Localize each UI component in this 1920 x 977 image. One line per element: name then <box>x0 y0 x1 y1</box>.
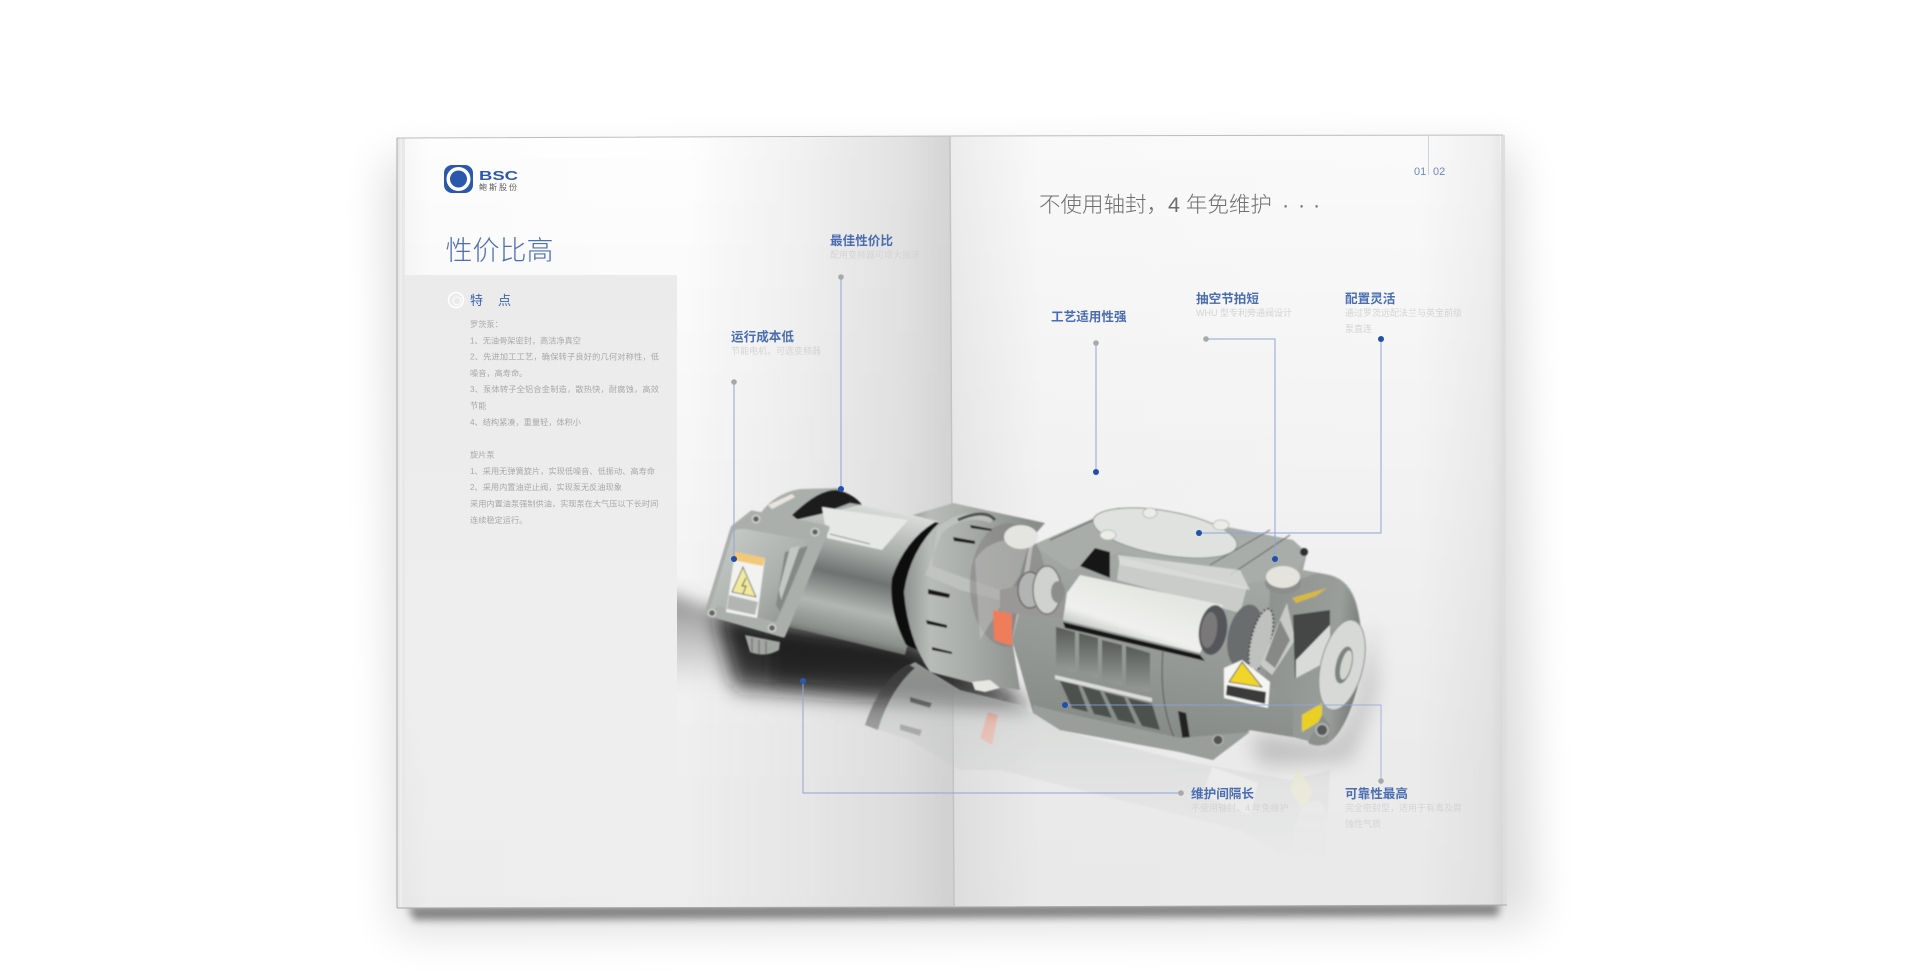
page stack edges <box>397 138 405 908</box>
callout: 工艺适用性强 <box>1051 309 1127 475</box>
product image: pump <box>677 487 1384 808</box>
callout: 维护间隔长: 不使用轴封，4 年免维护 <box>1191 802 1289 813</box>
callout: 可靠性最高: 蚀性气质 <box>1345 818 1381 829</box>
casing divider <box>1161 649 1174 737</box>
timing gear <box>1226 604 1262 664</box>
silhouette <box>1019 545 1362 712</box>
pump body <box>970 499 1374 760</box>
black coupling ring <box>891 522 946 650</box>
ground shadow <box>660 590 1376 765</box>
features text: 罗茨泵： <box>470 319 503 329</box>
junction box <box>707 513 827 655</box>
features text: 噪音，高寿命。 <box>470 368 527 378</box>
logo mark <box>444 165 473 193</box>
right page <box>950 135 1506 907</box>
features heading: 点 <box>498 293 511 308</box>
fan housing <box>904 503 1045 690</box>
lug bolt <box>1308 715 1330 746</box>
book pages <box>397 135 1507 908</box>
callout: 可靠性最高: 可靠性最高 <box>1345 786 1408 801</box>
features text: 3、泵体转子全铝合金制造，散热快，耐腐蚀，高效 <box>470 384 659 394</box>
callout: 运行成本低 <box>731 329 821 562</box>
transparent cutaway disc <box>970 523 1046 647</box>
callout: 运行成本低: 节能电机，可选变频器 <box>731 345 821 356</box>
book shadow <box>385 150 1535 932</box>
callout: 维护间隔长 <box>800 678 1289 813</box>
casing left flange <box>1012 614 1292 736</box>
features text: 1、采用无弹簧旋片，实现低噪音、低振动、高寿命 <box>470 466 655 476</box>
page numbers: 02 <box>1433 166 1445 178</box>
headline: · <box>1313 193 1320 217</box>
callout: 抽空节拍短 <box>1196 291 1292 562</box>
oil knob <box>1265 572 1301 594</box>
features text: 连续稳定运行。 <box>470 515 527 525</box>
icon: ring <box>448 292 464 308</box>
warning label <box>726 552 765 618</box>
features heading: 特 <box>470 293 483 308</box>
rotor end <box>1198 604 1228 656</box>
end housing <box>1269 574 1360 742</box>
logo wordmark: BSC <box>479 168 519 183</box>
black ring <box>792 490 862 522</box>
callout: 运行成本低: 运行成本低 <box>731 329 794 344</box>
cable gland <box>745 635 780 655</box>
features panel background <box>405 275 677 907</box>
callout: 维护间隔长: 维护间隔长 <box>1191 786 1254 801</box>
top cover <box>1033 508 1307 585</box>
motor end cap <box>761 487 862 520</box>
base foot <box>1033 705 1250 760</box>
shaft and bearings <box>1000 586 1040 614</box>
fins lower <box>1060 681 1160 730</box>
features text: 采用内置油泵强制供油，实现泵在大气压以下长时间 <box>470 498 658 508</box>
white knob <box>1004 525 1038 549</box>
callout: 配置灵活: 通过罗茨远配法兰与英宝前级 <box>1345 307 1462 318</box>
features text: 1、无油骨架密封，高洁净真空 <box>470 336 581 346</box>
title: 性价比高 <box>446 236 554 266</box>
data plate <box>1293 610 1330 678</box>
callout: 工艺适用性强: 工艺适用性强 <box>1051 309 1127 324</box>
cover plate <box>1092 506 1237 558</box>
callout: 抽空节拍短: WHU 型专利旁通阀设计 <box>1196 307 1292 318</box>
page numbers: 01 <box>1414 166 1426 178</box>
hot warning sticker <box>1224 660 1270 708</box>
features text: 2、采用内置油逆止阀，实现泵无反油现象 <box>470 482 622 492</box>
motor cylinder <box>775 505 938 655</box>
features text <box>470 319 659 525</box>
black clamp <box>1080 548 1110 578</box>
callout: 最佳性价比: 最佳性价比 <box>830 233 893 248</box>
upper rotor <box>1117 557 1247 613</box>
bracket <box>1260 603 1295 675</box>
page numbers <box>1414 136 1445 178</box>
callout: 最佳性价比: 配用变频器可增大抽速 <box>830 249 920 260</box>
callout: 抽空节拍短: 抽空节拍短 <box>1196 291 1259 306</box>
features text: 节能 <box>470 400 486 410</box>
lower rotor <box>1063 575 1223 653</box>
bottom yellow sticker <box>1302 703 1322 732</box>
fan slots <box>926 525 992 654</box>
features heading <box>470 293 511 308</box>
features text: 4、结构紧凑，重量轻，体积小 <box>470 417 581 427</box>
fins crossbar <box>1055 675 1152 702</box>
motor body <box>752 488 1045 692</box>
callout: 配置灵活 <box>1196 291 1462 536</box>
headline: · <box>1282 193 1289 217</box>
logo <box>444 165 519 193</box>
orange label <box>993 610 1012 646</box>
features text: 旋片泵 <box>470 450 495 460</box>
motor nameplate <box>822 507 908 550</box>
callout: 最佳性价比 <box>830 233 920 492</box>
features block <box>448 292 659 525</box>
flange <box>1310 615 1374 715</box>
brochure spread mockup <box>372 134 1548 946</box>
features text: 2、先进加工工艺，确保转子良好的几何对称性，低 <box>470 352 659 362</box>
top yellow sticker <box>1292 588 1327 603</box>
mounting foot <box>972 680 1000 692</box>
callout: 可靠性最高 <box>1062 702 1462 829</box>
logo chinese name: 鲍斯股份 <box>479 182 517 192</box>
headline: · <box>1298 193 1305 217</box>
callout: 可靠性最高: 完全密封型，适用于有毒及腐 <box>1345 802 1462 813</box>
bolts <box>708 515 819 632</box>
callout: 配置灵活: 泵直连 <box>1345 323 1372 334</box>
headline: 不使用轴封，4 年免维护 <box>1039 193 1272 217</box>
fins upper <box>1056 626 1150 682</box>
reflection <box>864 662 1329 808</box>
callout: 配置灵活: 配置灵活 <box>1345 291 1396 306</box>
left page <box>397 136 954 908</box>
dark seam <box>1063 622 1205 661</box>
